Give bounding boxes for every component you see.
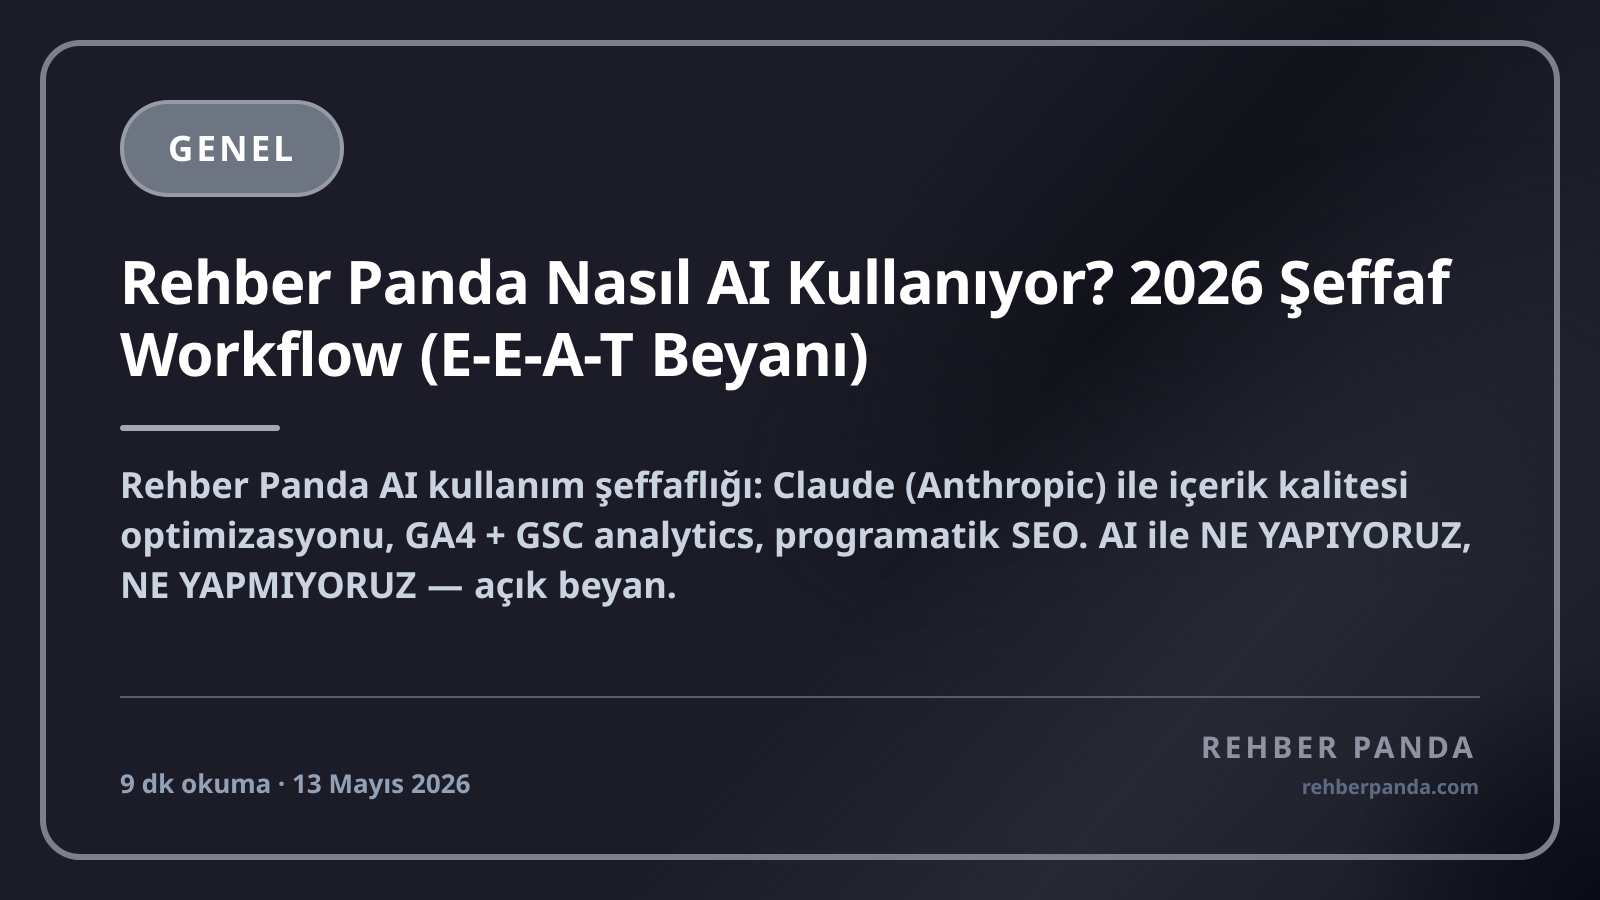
- website: rehberpanda.com: [1302, 773, 1479, 800]
- footer rule: [120, 696, 1480, 698]
- description: NE YAPMIYORUZ — açık beyan.: [120, 560, 677, 609]
- category badge: GENEL: [168, 125, 296, 172]
- title: [120, 240, 1453, 394]
- background: [872, 0, 1600, 900]
- title: Rehber Panda Nasıl AI Kullanıyor? 2026 Şeffaf: [120, 240, 1449, 322]
- description: Rehber Panda AI kullanım şeffaflığı: Claude (Anthropic) ile içerik kalitesi: [120, 460, 1409, 509]
- reading time and date: 9 dk okuma · 13 Mayıs 2026: [120, 765, 470, 801]
- brand name: REHBER PANDA: [1201, 726, 1477, 767]
- description: [120, 460, 1472, 609]
- title: Workflow (E-E-A-T Beyanı): [120, 312, 868, 394]
- accent divider: [120, 425, 280, 431]
- description: optimizasyonu, GA4 + GSC analytics, programatik SEO. AI ile NE YAPIYORUZ,: [120, 510, 1472, 559]
- category badge: [120, 100, 344, 197]
